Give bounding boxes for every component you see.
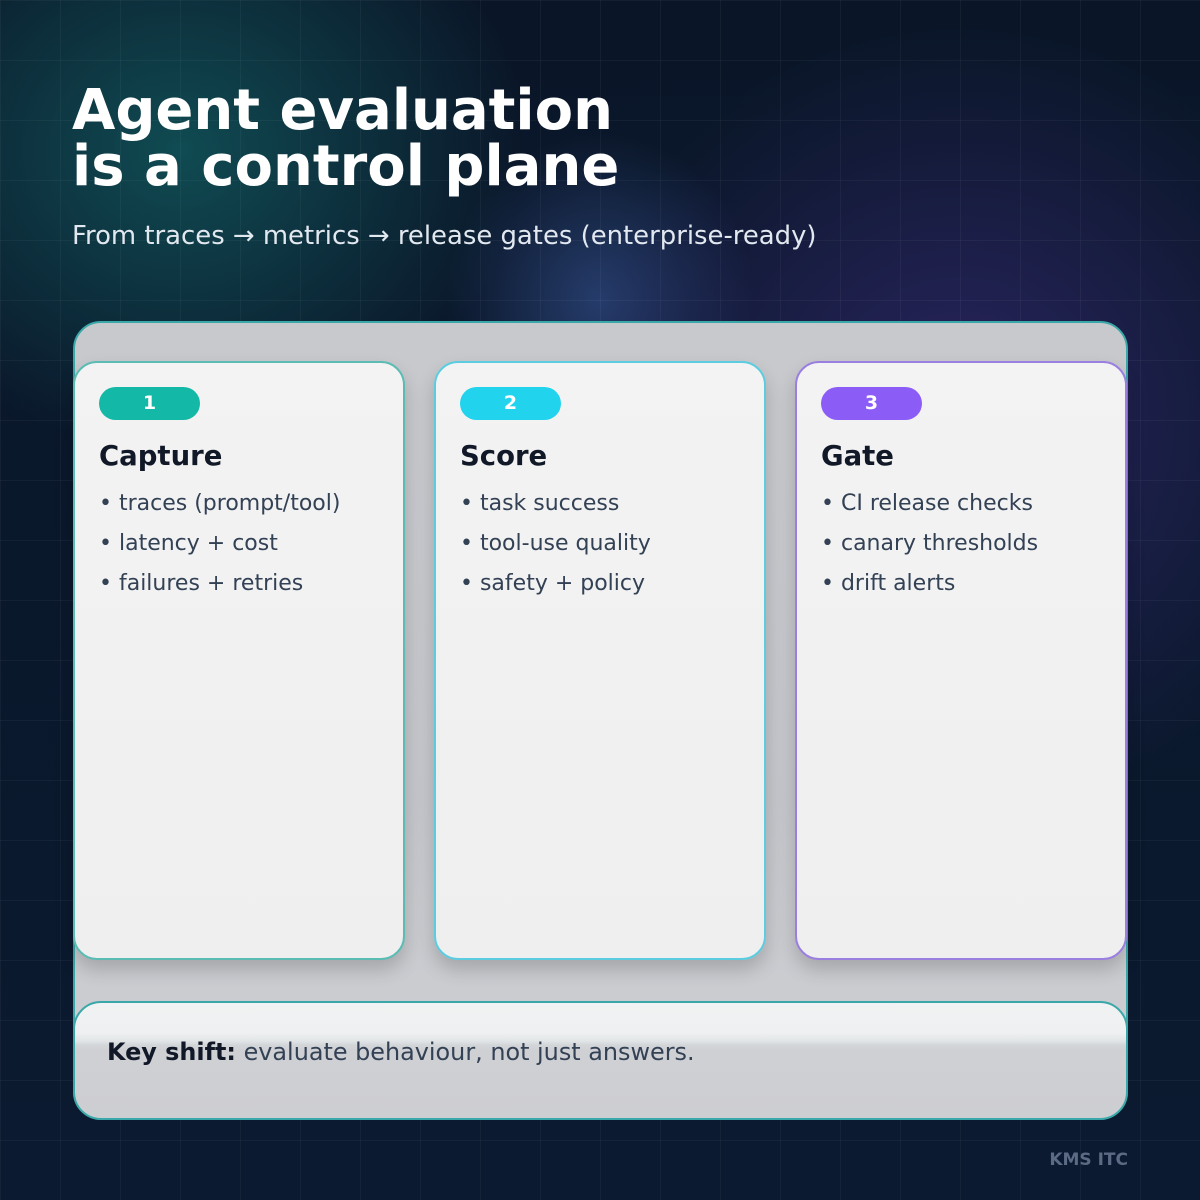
panel: main container [73,321,1128,1120]
list score: • safety + policy [460,571,645,596]
list gate: • canary thresholds [821,531,1038,556]
card: score [434,361,766,960]
list capture: • latency + cost [99,531,278,556]
list gate [821,491,1038,596]
card: gate [795,361,1127,960]
list score: • task success [460,491,619,516]
list capture: • failures + retries [99,571,303,596]
list gate: • CI release checks [821,491,1033,516]
title [72,78,619,199]
badge 1: 1 [143,392,156,414]
heading capture: Capture [99,440,222,472]
list capture [99,491,340,596]
footer callout: Key shift: evaluate behaviour, not just answers. [107,1038,695,1066]
badge 2 [460,387,561,420]
heading gate: Gate [821,440,894,472]
footer callout [73,1001,1128,1120]
subtitle: From traces → metrics → release gates (enterprise-ready) [72,221,817,251]
badge 3 [821,387,922,420]
list score [460,491,651,596]
brand: KMS ITC [1049,1150,1128,1170]
list gate: • drift alerts [821,571,955,596]
badge 3: 3 [865,392,878,414]
title: Agent evaluation [72,78,613,143]
badge 1 [99,387,200,420]
card: capture [73,361,405,960]
heading score: Score [460,440,547,472]
title: is a control plane [72,134,619,199]
badge 2: 2 [504,392,517,414]
list capture: • traces (prompt/tool) [99,491,340,516]
list score: • tool-use quality [460,531,651,556]
